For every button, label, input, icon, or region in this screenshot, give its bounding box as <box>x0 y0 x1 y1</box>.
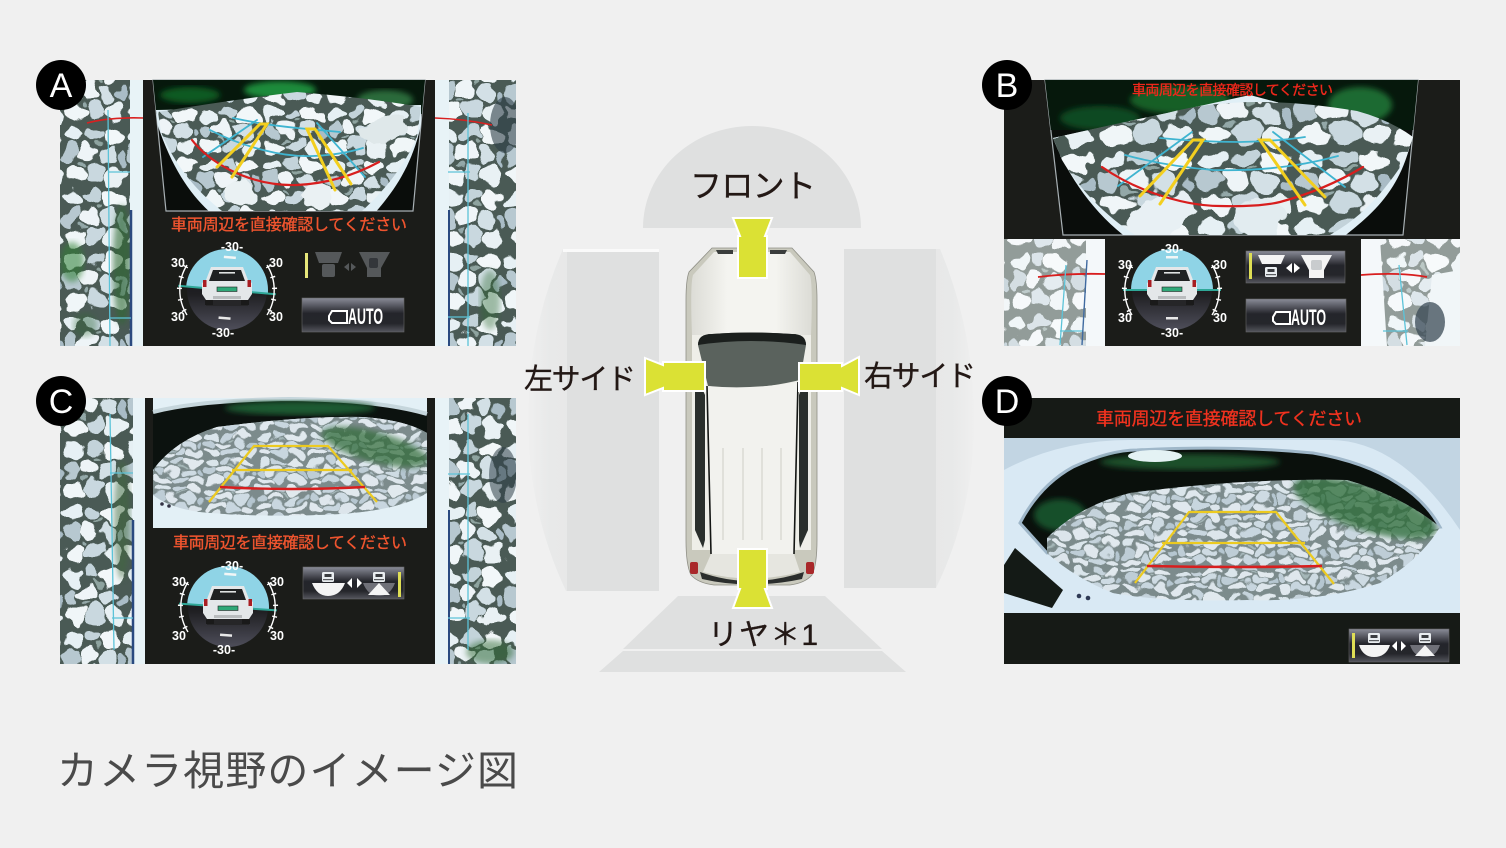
C right side camera view <box>435 398 516 664</box>
badge A <box>36 60 86 110</box>
C inclinometer gauge: 30 <box>172 629 186 643</box>
label: right side: 右サイド <box>864 360 976 393</box>
panel D: wide rear camera screen <box>1004 398 1460 664</box>
badge C: C <box>49 383 73 421</box>
camera icon: right <box>799 357 859 395</box>
A parking guide lines <box>192 118 379 190</box>
C inclinometer gauge: 30 <box>172 575 186 589</box>
D view mode button <box>1349 629 1449 662</box>
B AUTO button: AUTO <box>1291 305 1326 330</box>
camera icon: front <box>733 218 772 278</box>
front field of view <box>643 126 861 228</box>
badge B: B <box>996 67 1018 105</box>
D rear camera view <box>1004 438 1460 615</box>
B view mode button <box>1246 251 1345 283</box>
D warning message: 車両周辺を直接確認してください <box>1096 409 1362 429</box>
badge D <box>982 376 1032 426</box>
panel A: front camera screen <box>60 79 516 346</box>
panel C: rear camera screen <box>60 397 516 664</box>
label: rear: リヤ＊1 <box>708 619 818 652</box>
label: front: フロント <box>690 168 816 204</box>
camera icon: left <box>645 358 705 395</box>
B right side camera view <box>1360 239 1460 346</box>
A inclinometer gauge: 30 <box>269 256 283 270</box>
B inclinometer gauge: 30 <box>1213 258 1227 272</box>
A inclinometer gauge: -30- <box>221 240 243 254</box>
C inclinometer gauge: 30 <box>270 629 284 643</box>
badge D: D <box>995 383 1019 421</box>
D parking guide lines <box>1135 512 1334 584</box>
B inclinometer gauge: 30 <box>1118 311 1132 325</box>
A inclinometer gauge: 30 <box>269 310 283 324</box>
camera field-of-view diagram <box>524 126 976 672</box>
C warning message: 車両周辺を直接確認してください <box>173 534 407 552</box>
B front camera view <box>1044 79 1419 236</box>
badge A: A <box>50 67 73 105</box>
C parking guide lines <box>209 446 377 502</box>
A front camera view <box>152 79 426 212</box>
A AUTO button: AUTO <box>348 304 383 329</box>
A left side camera view <box>60 80 143 346</box>
C inclinometer gauge <box>172 559 284 657</box>
B parking guide lines <box>1102 132 1363 206</box>
A right side camera view <box>435 80 516 346</box>
right field of view <box>844 249 974 588</box>
B inclinometer gauge <box>1118 242 1227 340</box>
vehicle top view <box>686 248 817 585</box>
B inclinometer gauge: -30- <box>1161 326 1183 340</box>
A AUTO button <box>302 298 404 332</box>
panel B: wide front camera screen <box>1004 79 1460 346</box>
badge B <box>982 60 1032 110</box>
camera icon: rear <box>733 549 772 608</box>
B inclinometer gauge: -30- <box>1161 242 1183 256</box>
C left side camera view <box>60 398 145 664</box>
A inclinometer gauge: 30 <box>171 256 185 270</box>
B inclinometer gauge: 30 <box>1118 258 1132 272</box>
C inclinometer gauge: -30- <box>213 643 235 657</box>
C view mode button <box>303 567 404 599</box>
A view mode indicator <box>305 252 390 278</box>
A inclinometer gauge <box>171 240 283 340</box>
B AUTO button <box>1246 299 1346 332</box>
A warning message: 車両周辺を直接確認してください <box>171 216 407 234</box>
rear field of view <box>599 596 906 672</box>
C rear camera view <box>140 398 440 530</box>
B warning message: 車両周辺を直接確認してください <box>1132 82 1333 98</box>
B inclinometer gauge: 30 <box>1213 311 1227 325</box>
A inclinometer gauge: 30 <box>171 310 185 324</box>
title: カメラ視野のイメージ図 <box>57 748 518 794</box>
badge C <box>36 376 86 426</box>
A inclinometer gauge: -30- <box>212 326 234 340</box>
label: left side: 左サイド <box>524 363 636 396</box>
C inclinometer gauge: -30- <box>221 559 243 573</box>
B left side camera view <box>1004 239 1105 346</box>
left field of view <box>528 249 659 591</box>
C inclinometer gauge: 30 <box>270 575 284 589</box>
